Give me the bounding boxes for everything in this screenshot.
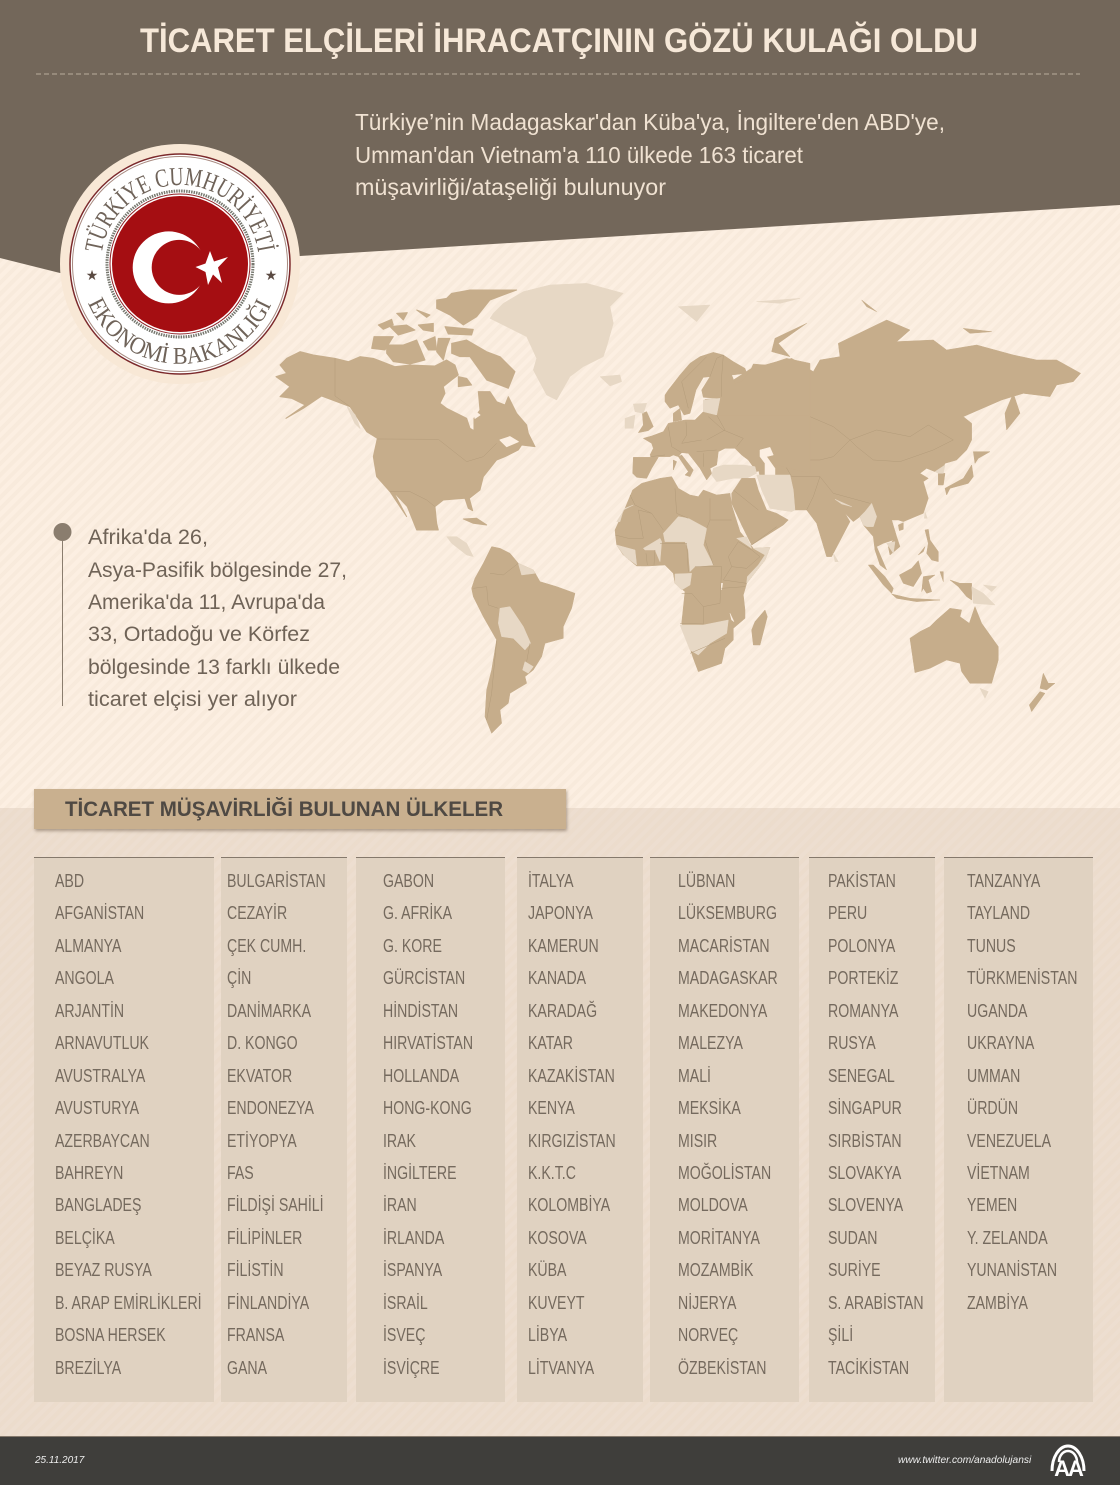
country column 6: SENEGAL — [828, 1066, 895, 1086]
country column 4: K.K.T.C — [528, 1163, 576, 1183]
country column 1: ARJANTİN — [55, 1001, 124, 1021]
country column 2: FİLİSTİN — [227, 1260, 284, 1280]
country column 3: IRAK — [383, 1130, 416, 1150]
country column 6: RUSYA — [828, 1033, 876, 1053]
country column 1: BANGLADEŞ — [55, 1195, 141, 1215]
side text: Asya-Pasifik bölgesinde 27, — [88, 559, 347, 582]
country column 1: ABD — [55, 871, 84, 891]
footer bar — [0, 1436, 1120, 1485]
country column 6: PAKİSTAN — [828, 871, 896, 891]
country column 2: ETİYOPYA — [227, 1130, 297, 1150]
country column 1: ANGOLA — [55, 968, 114, 988]
country column 3: GABON — [383, 871, 434, 891]
country column 7: VİETNAM — [967, 1163, 1030, 1183]
country column 1: AVUSTURYA — [55, 1098, 139, 1118]
borders South America — [473, 563, 530, 720]
country column 5: MACARİSTAN — [678, 936, 770, 956]
seal text: TÜRKİYE CUMHURİYETİ — [84, 168, 279, 252]
country column 1: BEYAZ RUSYA — [55, 1260, 152, 1280]
map: South America and Greenland — [447, 283, 623, 733]
country column 3: İSPANYA — [383, 1260, 442, 1280]
intro text: Umman'dan Vietnam'a 110 ülkede 163 ticaret — [355, 142, 804, 168]
seal text: ★ — [86, 269, 98, 284]
light Africa countries — [617, 475, 795, 655]
seal text: EKONOMİ BAKANLIĞI — [88, 296, 272, 364]
country column 2: D. KONGO — [227, 1033, 298, 1053]
side note with bullet — [54, 523, 347, 711]
country column 2: FİLİPİNLER — [227, 1228, 302, 1248]
country column 5: MALİ — [678, 1066, 711, 1086]
country column 2: CEZAYİR — [227, 903, 287, 923]
country column 4: KOLOMBİYA — [528, 1195, 610, 1215]
country column 2 — [221, 857, 347, 1402]
country column 5: MEKSİKA — [678, 1098, 741, 1118]
country column 4: KENYA — [528, 1098, 575, 1118]
country column 4: KUVEYT — [528, 1293, 585, 1313]
country column 3: İSVİÇRE — [383, 1358, 440, 1378]
country column 3: İSVEÇ — [383, 1325, 425, 1345]
country column 7: TAYLAND — [967, 903, 1030, 923]
country column 7: YUNANİSTAN — [967, 1260, 1057, 1280]
country column 7: VENEZUELA — [967, 1130, 1051, 1150]
country column 7: ZAMBİYA — [967, 1293, 1028, 1313]
country column 6: SIRBİSTAN — [828, 1130, 902, 1150]
country column 2: BULGARİSTAN — [227, 871, 326, 891]
country column 6: SLOVENYA — [828, 1195, 903, 1215]
country column 3: G. AFRİKA — [383, 903, 452, 923]
country column 3: İSRAİL — [383, 1293, 428, 1313]
intro text: Türkiye’nin Madagaskar'dan Küba'ya, İngiltere'den ABD'ye, — [355, 109, 945, 135]
country column 5: MAKEDONYA — [678, 1001, 767, 1021]
banner heading — [34, 789, 566, 829]
country column 4: KIRGIZİSTAN — [528, 1130, 616, 1150]
country column 5: NİJERYA — [678, 1293, 736, 1313]
country column 7: ÜRDÜN — [967, 1098, 1018, 1118]
bullet line — [54, 523, 72, 706]
country column 1: BELÇİKA — [55, 1228, 115, 1248]
country column 6 — [809, 857, 935, 1402]
country column 2: GANA — [227, 1358, 267, 1378]
country column 1: BREZİLYA — [55, 1358, 121, 1378]
borders North America — [335, 358, 497, 507]
country column 2: FİNLANDİYA — [227, 1293, 309, 1313]
crescent and star — [133, 231, 228, 303]
country column 7: TUNUS — [967, 936, 1016, 956]
country column 4: KARADAĞ — [528, 1001, 597, 1021]
country column 2: ENDONEZYA — [227, 1098, 314, 1118]
country column 4: KOSOVA — [528, 1228, 587, 1248]
country column 4: KAMERUN — [528, 936, 599, 956]
country column 5: MOĞOLİSTAN — [678, 1163, 771, 1183]
country column 7: YEMEN — [967, 1195, 1017, 1215]
country column 1: AVUSTRALYA — [55, 1066, 145, 1086]
lakes — [721, 583, 734, 622]
country column 4: LİTVANYA — [528, 1358, 594, 1378]
country column 4: LİBYA — [528, 1325, 567, 1345]
world map — [276, 283, 1081, 733]
borders Africa — [615, 488, 777, 653]
intro text — [355, 109, 945, 200]
social link: www.twitter.com/anadolujansi — [898, 1455, 1031, 1466]
map: Europe — [625, 352, 810, 482]
header band — [0, 0, 1120, 273]
country column 5: NORVEÇ — [678, 1325, 738, 1345]
country column 7: TANZANYA — [967, 871, 1040, 891]
country column 5: MORİTANYA — [678, 1228, 760, 1248]
borders Asia — [760, 417, 953, 510]
country column 1: BOSNA HERSEK — [55, 1325, 166, 1345]
country column 4: JAPONYA — [528, 903, 593, 923]
side text: bölgesinde 13 farklı ülkede — [88, 656, 340, 679]
seal: Ekonomi Bakanlığı — [60, 144, 300, 384]
country column 7: Y. ZELANDA — [967, 1228, 1048, 1248]
intro text: müşavirliği/ataşeliği bulunuyor — [355, 174, 666, 200]
country column 6: ŞİLİ — [828, 1325, 853, 1345]
country column 5 — [650, 857, 799, 1402]
country column 5: MOLDOVA — [678, 1195, 748, 1215]
country column 1: ALMANYA — [55, 936, 121, 956]
country column 7: UGANDA — [967, 1001, 1027, 1021]
country column 6: ROMANYA — [828, 1001, 898, 1021]
side text: Amerika'da 11, Avrupa'da — [88, 591, 325, 614]
country column 7: TÜRKMENİSTAN — [967, 968, 1077, 988]
country column 6: SUDAN — [828, 1228, 877, 1248]
country column 1 — [34, 857, 214, 1402]
country column 4: KÜBA — [528, 1260, 566, 1280]
country column 3: İNGİLTERE — [383, 1163, 457, 1183]
side text: 33, Ortadoğu ve Körfez — [88, 623, 310, 646]
country column 3: İRLANDA — [383, 1228, 444, 1248]
country column 3: HİNDİSTAN — [383, 1001, 458, 1021]
country column 2: EKVATOR — [227, 1066, 292, 1086]
country column 7: UKRAYNA — [967, 1033, 1034, 1053]
light countries Americas — [447, 283, 623, 673]
side text — [88, 526, 347, 711]
country column 4 — [517, 857, 643, 1402]
country column 7: UMMAN — [967, 1066, 1020, 1086]
map: Asia — [678, 298, 1081, 712]
title: TİCARET ELÇİLERİ İHRACATÇININ GÖZÜ KULAĞI OLDU — [140, 22, 978, 60]
country column 4: İTALYA — [528, 871, 574, 891]
country column 1: ARNAVUTLUK — [55, 1033, 149, 1053]
country column 3: HIRVATİSTAN — [383, 1033, 473, 1053]
country column 3: GÜRCİSTAN — [383, 968, 465, 988]
banner heading: TİCARET MÜŞAVİRLİĞİ BULUNAN ÜLKELER — [65, 797, 503, 821]
country column 5: MISIR — [678, 1130, 717, 1150]
country column 2: DANİMARKA — [227, 1001, 311, 1021]
country column 3 — [356, 857, 505, 1402]
country column 1: BAHREYN — [55, 1163, 123, 1183]
country column 6: SLOVAKYA — [828, 1163, 901, 1183]
country column 2: FİLDİŞİ SAHİLİ — [227, 1195, 324, 1215]
country column 2: ÇİN — [227, 968, 251, 988]
country column 3: HOLLANDA — [383, 1066, 459, 1086]
side text: Afrika'da 26, — [88, 526, 208, 549]
country column 5: MALEZYA — [678, 1033, 743, 1053]
country column 4: KAZAKİSTAN — [528, 1066, 615, 1086]
country column 5: LÜBNAN — [678, 871, 735, 891]
light Europe countries — [625, 398, 757, 482]
seal text: ★ — [265, 269, 277, 284]
country column 6: SURİYE — [828, 1260, 881, 1280]
icon: AA logo — [1050, 1444, 1086, 1478]
map: Africa and Middle East — [615, 475, 795, 672]
country column 1: AFGANİSTAN — [55, 903, 144, 923]
country column 4: KATAR — [528, 1033, 573, 1053]
country column 2: FAS — [227, 1163, 254, 1183]
seal text — [84, 168, 279, 364]
country column 5: LÜKSEMBURG — [678, 903, 777, 923]
country column 6: S. ARABİSTAN — [828, 1293, 924, 1313]
country column 7 — [944, 857, 1093, 1402]
borders Europe — [650, 355, 743, 467]
country column 5: MADAGASKAR — [678, 968, 778, 988]
country column 3: G. KORE — [383, 936, 442, 956]
date: 25.11.2017 — [35, 1455, 84, 1466]
country column 6: TACİKİSTAN — [828, 1358, 909, 1378]
country column 5: MOZAMBİK — [678, 1260, 753, 1280]
country column 1: B. ARAP EMİRLİKLERİ — [55, 1293, 202, 1313]
Caspian Sea — [760, 447, 775, 477]
map: North America — [276, 290, 535, 530]
country column 4: KANADA — [528, 968, 586, 988]
country column 3: İRAN — [383, 1195, 417, 1215]
country column 2: ÇEK CUMH. — [227, 936, 306, 956]
side text: ticaret elçisi yer alıyor — [88, 688, 297, 711]
country column 3: HONG-KONG — [383, 1098, 472, 1118]
light Asia and Oceania islands — [678, 298, 988, 698]
country column 6: PORTEKİZ — [828, 968, 898, 988]
map: Southeast Asia — [860, 452, 997, 605]
country column 1: AZERBAYCAN — [55, 1130, 150, 1150]
country column 5: ÖZBEKİSTAN — [678, 1358, 766, 1378]
country column 6: POLONYA — [828, 936, 895, 956]
country column 2: FRANSA — [227, 1325, 284, 1345]
country column 6: PERU — [828, 903, 867, 923]
country column 6: SİNGAPUR — [828, 1098, 902, 1118]
